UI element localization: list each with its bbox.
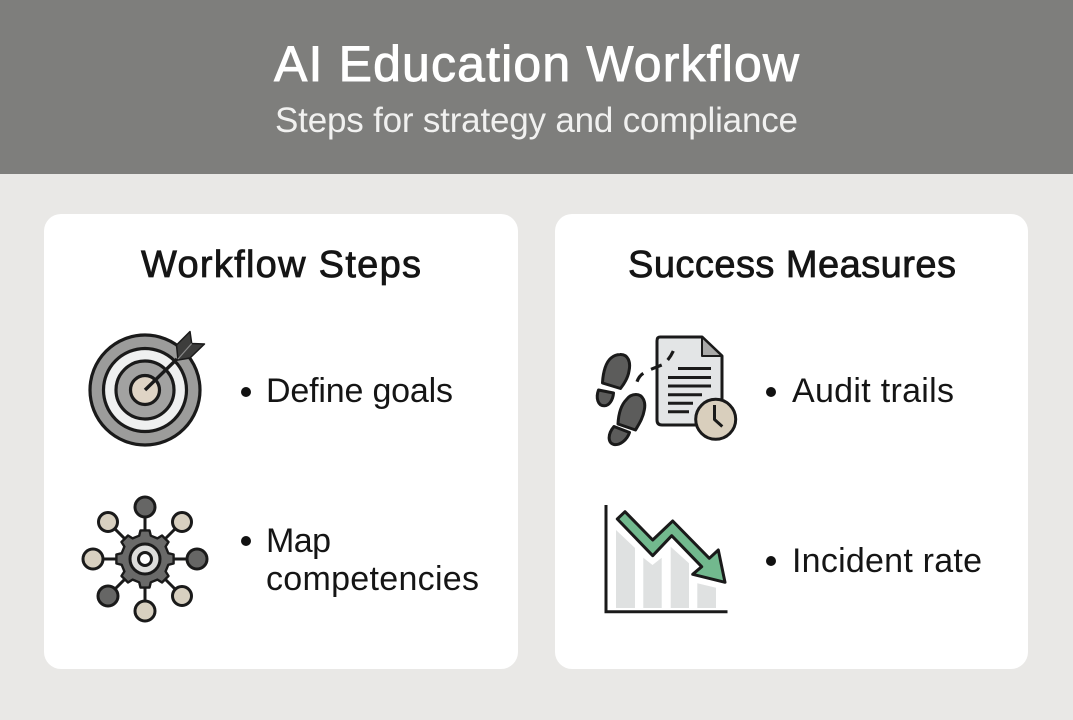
subtitle: Steps for strategy and compliance	[275, 101, 798, 140]
panel: workflow steps	[44, 214, 518, 669]
icon: gear network	[83, 497, 207, 621]
list item: map competencies: competencies	[266, 560, 479, 598]
list item: incident rate: Incident rate	[792, 542, 982, 580]
icon: footprints and document with clock	[597, 337, 736, 445]
heading: success measures: Success Measures	[628, 244, 956, 286]
icon: falling line chart	[606, 505, 728, 612]
panel: success measures	[555, 214, 1028, 669]
heading: workflow steps: Workflow Steps	[141, 244, 421, 286]
icon: target with arrow	[90, 332, 204, 445]
title: AI Education Workflow	[274, 36, 800, 92]
list item: map competencies	[241, 522, 479, 598]
list item: map competencies: Map	[266, 522, 331, 560]
list item: define goals: Define goals	[266, 372, 453, 410]
header banner	[0, 0, 1073, 174]
list item: audit trails: Audit trails	[792, 372, 954, 410]
